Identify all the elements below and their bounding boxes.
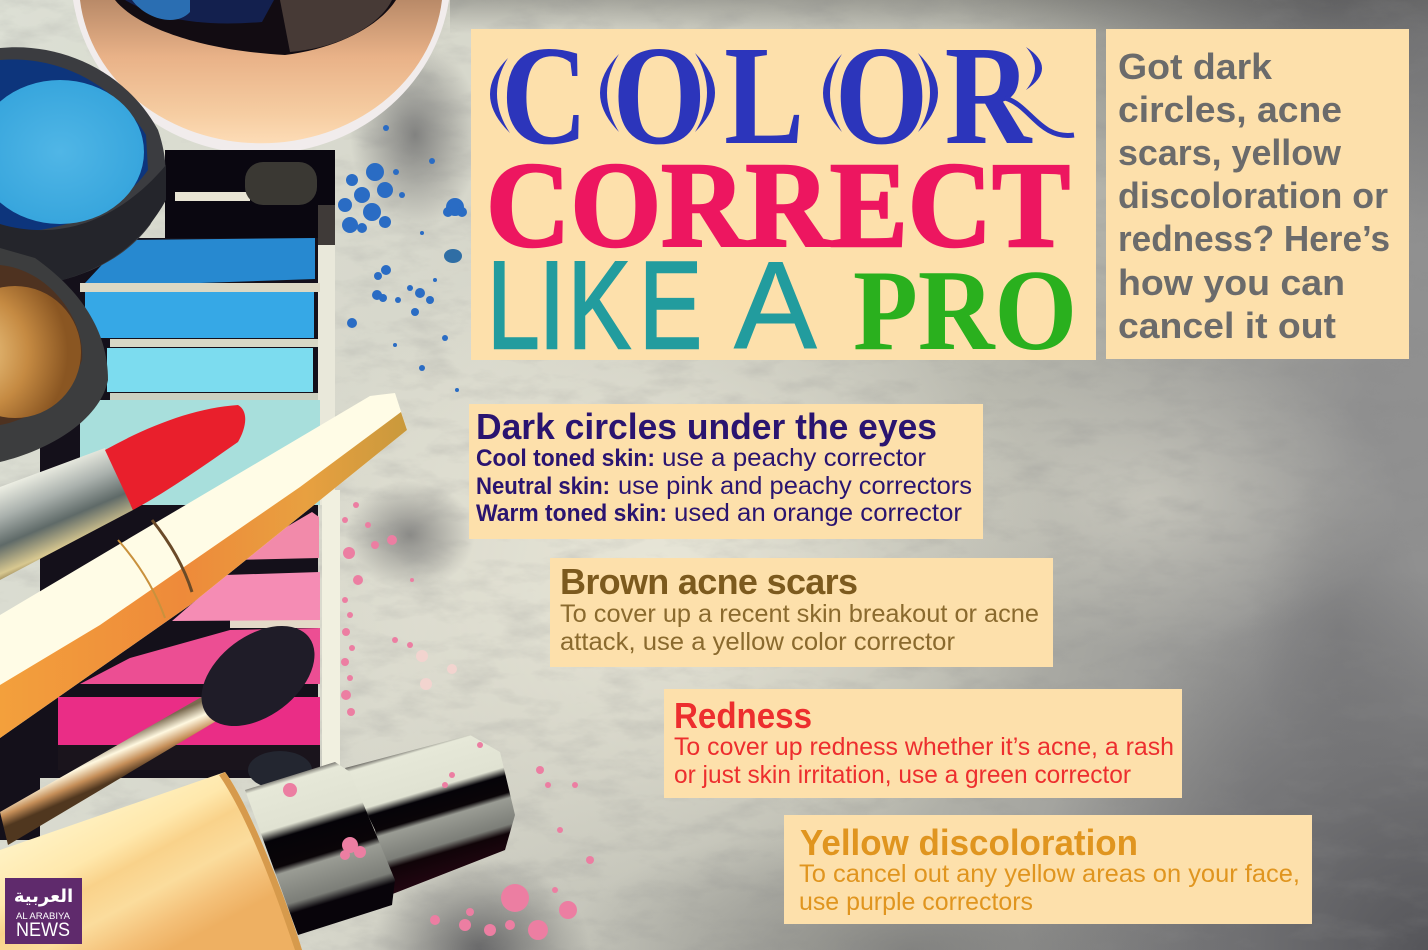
blue eyeshadow pot [0, 47, 166, 290]
advice lines: use a peachy corrector [662, 444, 926, 472]
advice lines: To cancel out any yellow areas on your face, [799, 860, 1300, 888]
panel: intro text [1106, 29, 1409, 359]
panel: intro text: scars, yellow [1118, 132, 1342, 173]
advice lines: To cover up redness whether it’s acne, a rash [674, 733, 1174, 761]
panel: title [471, 18, 1096, 375]
gold tube lipstick [0, 393, 407, 738]
advice lines [799, 860, 1300, 916]
panel: yellow discoloration [784, 815, 1312, 924]
foundation bottle [0, 772, 302, 950]
advice lines: Warm toned skin: [476, 500, 667, 527]
panel: intro text: cancel it out [1118, 305, 1336, 346]
panel: brown acne scars [550, 558, 1053, 667]
heading line: COLOR: COLOR [501, 18, 1033, 174]
advice lines: Neutral skin: [476, 473, 610, 500]
heading line: CORRECT: CORRECT [486, 138, 1070, 273]
gold eyeshadow pot [0, 248, 108, 462]
advice lines: To cover up a recent skin breakout or acne [560, 600, 1039, 628]
advice lines: use purple correctors [799, 888, 1033, 916]
advice lines: attack, use a yellow color corrector [560, 628, 955, 656]
advice lines: use pink and peachy correctors [618, 472, 972, 500]
pink pan 4 [58, 697, 320, 745]
black bottle cap [245, 735, 515, 935]
advice lines [476, 444, 972, 527]
heading: dark circles: Dark circles under the eyes [476, 406, 937, 447]
blue pan 3 [107, 348, 313, 392]
panel: intro text: how you can [1118, 262, 1345, 303]
heading line: PRO: PRO [853, 247, 1077, 375]
heading line: A: A [734, 237, 817, 375]
pink pan 2 [172, 572, 320, 621]
advice lines [674, 733, 1174, 789]
powder compact [73, 0, 449, 154]
palette tray [0, 150, 340, 840]
heading: yellow discoloration: Yellow discoloration [800, 822, 1138, 863]
panel: intro text: discoloration or [1118, 175, 1388, 216]
panel: intro text: circles, acne [1118, 89, 1342, 130]
pink pan 3 [80, 628, 320, 684]
sponge applicator [175, 162, 317, 205]
pink pan 1 [230, 512, 319, 560]
advice lines [560, 600, 1039, 656]
logo: Al Arabiya News: العربية [14, 886, 73, 907]
spilled blue powder [338, 125, 467, 392]
blue pan 1 [85, 238, 315, 283]
heading line: LIKE: LIKE [487, 237, 702, 375]
panel: dark circles [469, 404, 983, 539]
panel: intro text: Got dark [1118, 46, 1273, 87]
logo: Al Arabiya News [5, 878, 82, 944]
heading: redness: Redness [674, 695, 812, 736]
logo: Al Arabiya News: AL ARABIYA [16, 911, 71, 922]
blue pan 2 [85, 292, 314, 338]
advice lines: Cool toned skin: [476, 445, 655, 472]
logo: Al Arabiya News: NEWS [16, 920, 70, 941]
panel: redness [664, 689, 1182, 798]
heading: brown acne scars: Brown acne scars [560, 561, 858, 602]
spilled pink powder [283, 502, 594, 940]
advice lines: or just skin irritation, use a green corrector [674, 761, 1131, 789]
makeup brush [0, 606, 333, 845]
red lipstick [0, 405, 245, 580]
panel: intro text: redness? Here’s [1118, 218, 1390, 259]
advice lines: used an orange corrector [674, 499, 962, 527]
